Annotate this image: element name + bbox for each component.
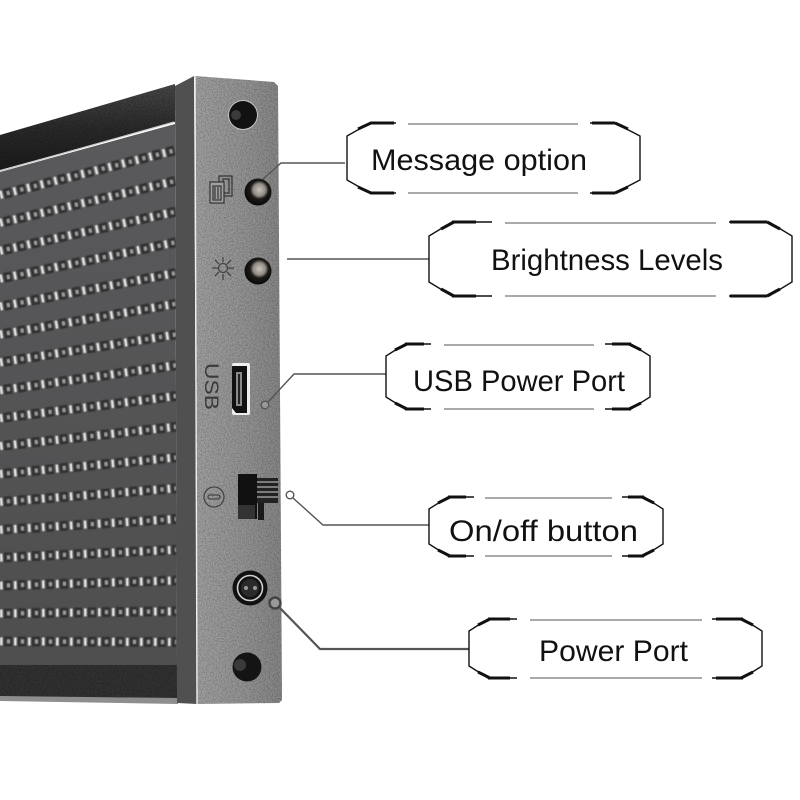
callout: Message option: Message option bbox=[371, 144, 587, 177]
leader: brightness bbox=[287, 258, 429, 260]
callout: Power Port bbox=[469, 619, 762, 678]
icon: message symbol bbox=[210, 176, 232, 203]
leader: power port bbox=[270, 598, 469, 649]
top frame bbox=[0, 84, 175, 170]
icon: power symbol bbox=[204, 487, 224, 507]
icon: USB port bbox=[232, 363, 250, 415]
icon: brightness symbol bbox=[212, 257, 234, 280]
leader: USB port bbox=[261, 374, 386, 409]
leader: message option bbox=[263, 163, 345, 179]
bottom frame bbox=[0, 665, 178, 698]
callout: Power Port: Power Port bbox=[539, 635, 689, 668]
callout: Brightness Levels bbox=[429, 222, 792, 296]
icon: message button bbox=[244, 178, 272, 206]
USB label on plate: USB bbox=[200, 363, 221, 410]
icon: brightness button bbox=[244, 258, 272, 284]
LED display body bbox=[0, 84, 178, 704]
callout: USB Power Port: USB Power Port bbox=[413, 365, 626, 398]
LED rows bbox=[0, 150, 176, 642]
callout: Message option bbox=[347, 123, 640, 193]
callout: USB Power Port bbox=[386, 344, 650, 409]
icon: on/off switch bbox=[238, 474, 278, 520]
leader: on/off bbox=[286, 491, 429, 525]
icon: power jack bbox=[232, 570, 268, 606]
callout: On/off button: On/off button bbox=[449, 515, 638, 548]
icon: bottom screw bbox=[232, 652, 262, 682]
callout: On/off button bbox=[429, 497, 663, 556]
screen bbox=[0, 124, 177, 665]
icon: top screw bbox=[228, 100, 258, 130]
side strip bbox=[175, 76, 197, 704]
metal end plate bbox=[195, 76, 282, 704]
callout: Brightness Levels: Brightness Levels bbox=[491, 244, 723, 277]
